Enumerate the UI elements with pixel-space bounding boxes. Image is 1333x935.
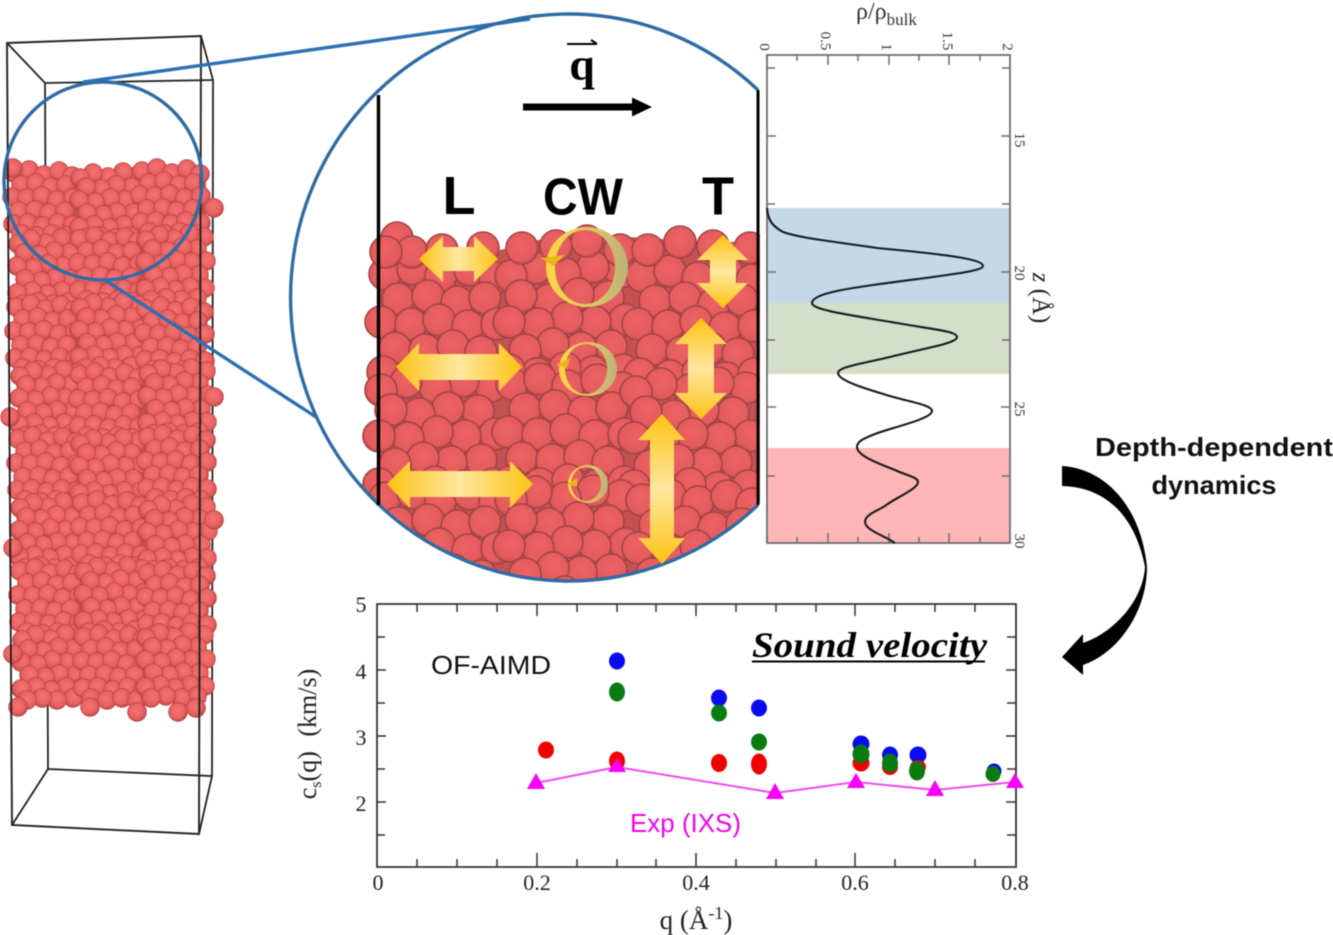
- density z tick labels: 30: [1011, 534, 1027, 548]
- y axis title: c: [293, 788, 322, 799]
- x axis title: -1: [708, 903, 723, 923]
- density z tick labels: [1011, 132, 1027, 548]
- label CW: CW: [543, 168, 624, 226]
- experimental triangles: [527, 758, 1024, 799]
- curved arrow: [1062, 466, 1147, 675]
- experimental line: [536, 767, 1015, 793]
- annotation: depth-dependent dynamics: dynamics: [1152, 470, 1276, 500]
- chart frame and ticks: [377, 604, 1016, 867]
- x tick labels: 0.8: [1001, 870, 1029, 895]
- panel: magnified surface: [291, 14, 770, 618]
- heading Sound velocity: Sound velocity: [752, 625, 988, 665]
- transverse arrow middle: [675, 318, 727, 419]
- label OF-AIMD: OF-AIMD: [431, 650, 551, 680]
- density x tick labels: [756, 32, 1015, 51]
- label L: L: [442, 166, 476, 226]
- depth band: green: [767, 303, 1010, 374]
- density z tick labels: 20: [1011, 266, 1027, 280]
- arrow: q direction: [523, 98, 652, 116]
- density x tick labels: 0: [756, 43, 772, 51]
- density x tick labels: 1.5: [939, 32, 955, 50]
- label T: T: [702, 166, 734, 226]
- x tick labels: 0.2: [523, 870, 551, 895]
- q vector label: q: [569, 39, 595, 90]
- x tick labels: 0.6: [841, 870, 869, 895]
- y tick labels: 3: [356, 725, 366, 750]
- density z tick labels: 15: [1011, 132, 1027, 148]
- density z tick labels: 25: [1011, 402, 1027, 416]
- x tick labels: 0.4: [682, 870, 710, 895]
- y axis title: s: [308, 781, 325, 788]
- circular wave arrow bottom: [568, 465, 608, 503]
- sound velocity chart: [293, 592, 1029, 935]
- zoom connector lines: [83, 19, 530, 417]
- y tick labels: 2: [356, 791, 366, 816]
- right wall line: [756, 90, 760, 505]
- atoms slab: [1, 159, 223, 721]
- x axis title: ): [723, 905, 732, 935]
- longitudinal arrow top: [419, 236, 498, 282]
- simulation box back edges: [7, 36, 213, 834]
- depth band: blue: [767, 208, 1010, 303]
- label Exp (IXS): Exp (IXS): [630, 808, 741, 838]
- longitudinal arrow middle: [396, 343, 522, 391]
- red data points: [538, 742, 926, 775]
- circular wave arrow top: [541, 227, 628, 307]
- y tick labels: [356, 592, 366, 816]
- transverse arrow top: [697, 235, 748, 308]
- y tick labels: 5: [356, 592, 366, 617]
- density x tick labels: 0.5: [817, 32, 833, 50]
- x tick labels: 0: [372, 870, 384, 895]
- y axis title: (q) (km/s): [293, 669, 322, 781]
- density x tick labels: 2: [999, 43, 1015, 51]
- magnified atoms: [361, 220, 761, 580]
- longitudinal arrow bottom: [387, 461, 533, 508]
- depth axis title: z (Å): [1027, 272, 1054, 323]
- depth band: red: [767, 448, 1010, 543]
- density axes frame: [767, 55, 1010, 543]
- x tick labels: [372, 870, 1029, 895]
- panel: simulation box with atoms: [1, 36, 223, 834]
- circular wave arrow middle: [556, 342, 617, 396]
- density x tick labels: 1: [878, 43, 894, 51]
- magnifier outline: [291, 14, 758, 581]
- blue data points: [609, 652, 1002, 778]
- left wall line: [377, 95, 380, 505]
- simulation box front edges: [7, 36, 201, 834]
- zoom circle on surface: [4, 82, 202, 280]
- x axis title: q (Å: [660, 905, 708, 935]
- density profile chart: [756, 0, 1054, 548]
- annotation: depth-dependent dynamics: [1095, 432, 1333, 500]
- density axis title: bulk: [887, 10, 917, 29]
- annotation: depth-dependent dynamics: Depth-dependent: [1095, 432, 1333, 462]
- density curve: [767, 208, 983, 543]
- y tick labels: 4: [356, 659, 366, 684]
- green data points: [609, 682, 1000, 782]
- transverse arrow bottom: [638, 414, 685, 564]
